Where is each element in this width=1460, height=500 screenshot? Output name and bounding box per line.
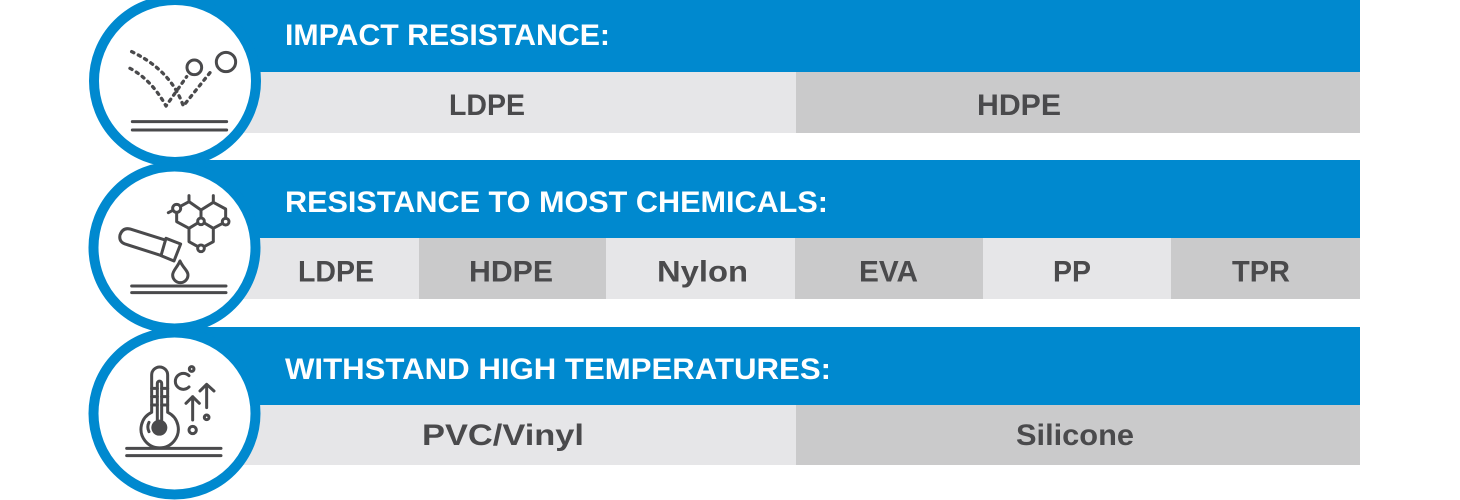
icon: test tube and molecule bbox=[120, 196, 229, 293]
cell: TPR: TPR bbox=[1232, 256, 1290, 288]
cell: Silicone bbox=[796, 405, 1360, 465]
cell: PP: PP bbox=[1053, 256, 1091, 288]
badge: temperatures bbox=[94, 332, 256, 494]
cell: Nylon bbox=[606, 238, 795, 299]
badge: chemicals bbox=[94, 166, 256, 328]
panel: withstand high temperatures bbox=[175, 327, 1360, 465]
icon: thermometer and rising arrows bbox=[127, 367, 221, 456]
icon: bouncing balls bbox=[130, 52, 236, 130]
cell: PVC/Vinyl: PVC/Vinyl bbox=[422, 419, 584, 452]
badge: impact bbox=[94, 0, 256, 162]
heading: chemicals: RESISTANCE TO MOST CHEMICALS: bbox=[285, 186, 828, 219]
cell: TPR bbox=[1171, 238, 1360, 299]
cell: HDPE: HDPE bbox=[469, 256, 553, 288]
cell: LDPE: LDPE bbox=[449, 89, 525, 122]
cell: Silicone: Silicone bbox=[1016, 419, 1134, 452]
cell: HDPE bbox=[796, 72, 1360, 133]
cell: LDPE bbox=[240, 238, 419, 299]
header bar: impact resistance bbox=[175, 0, 1360, 72]
cell: PP bbox=[983, 238, 1171, 299]
header bar: temperatures bbox=[175, 327, 1360, 405]
cell: EVA: EVA bbox=[859, 256, 918, 288]
heading: impact resistance: IMPACT RESISTANCE: bbox=[285, 19, 610, 52]
panel: impact resistance bbox=[175, 0, 1360, 133]
header bar: chemicals bbox=[175, 160, 1360, 238]
panel: resistance to most chemicals bbox=[175, 160, 1360, 299]
cell: EVA bbox=[795, 238, 983, 299]
cell: LDPE bbox=[240, 72, 796, 133]
heading: temperatures: WITHSTAND HIGH TEMPERATURES: bbox=[285, 353, 831, 386]
cell: HDPE: HDPE bbox=[977, 89, 1061, 122]
cell: LDPE: LDPE bbox=[298, 256, 374, 288]
cell: HDPE bbox=[419, 238, 606, 299]
cell: PVC/Vinyl bbox=[240, 405, 796, 465]
cell: Nylon: Nylon bbox=[657, 256, 748, 288]
